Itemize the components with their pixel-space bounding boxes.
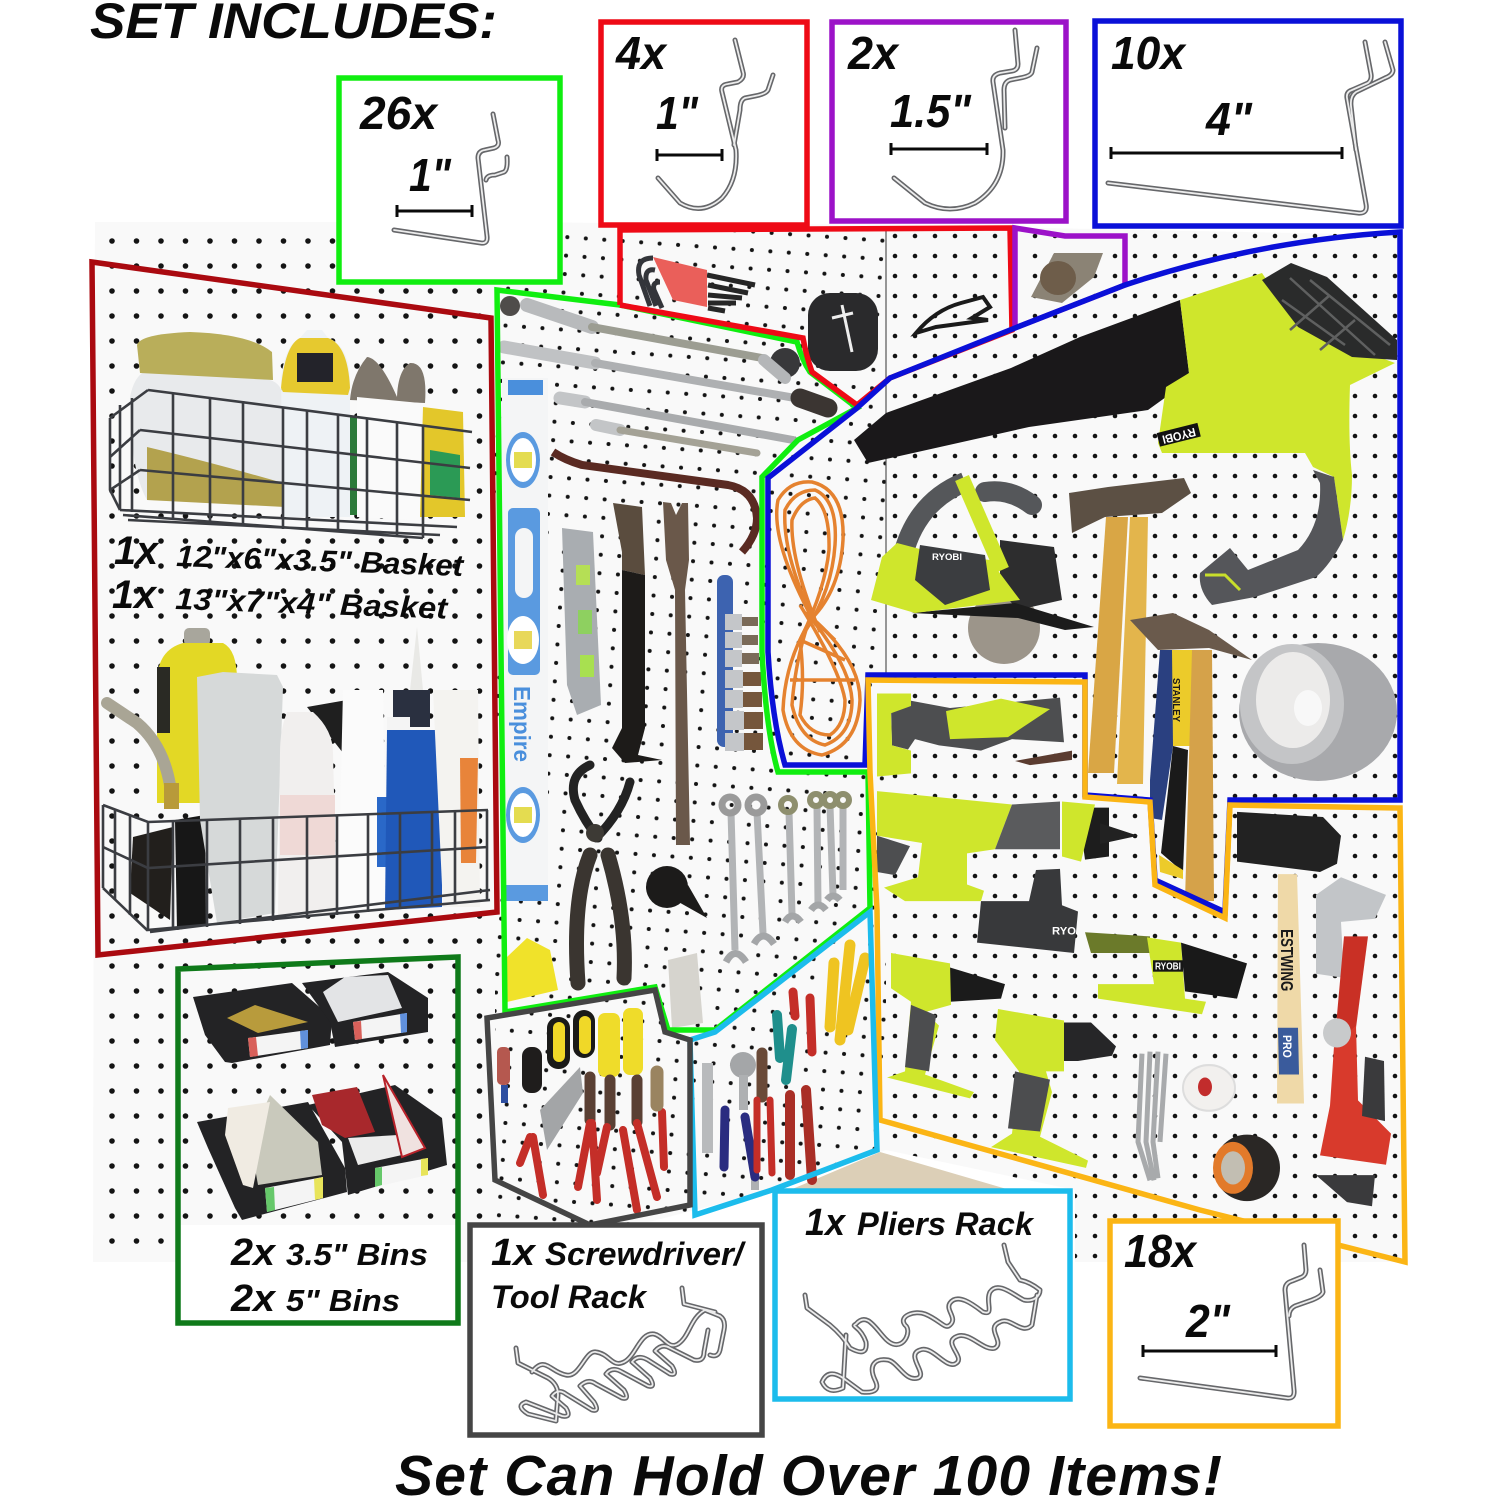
panel: screwdriver rack tools	[497, 1008, 664, 1210]
small screwdrivers	[497, 1047, 542, 1103]
leaf blower	[854, 263, 1397, 605]
red and teal pliers	[757, 992, 812, 1180]
mallet: PRO	[1280, 1035, 1294, 1058]
small parts pack	[668, 953, 703, 1028]
large pliers	[573, 765, 630, 983]
callout: bins: 2x	[230, 1278, 277, 1320]
leaf blower: RYOBI	[1161, 425, 1197, 447]
callout: 26x 1 inch hook: 1"	[409, 149, 452, 201]
callout: bins	[178, 957, 458, 1323]
outline: dark red basket region	[92, 262, 497, 955]
nail puller	[663, 502, 690, 845]
mallet: ESTWING	[1277, 929, 1298, 991]
callout: 18x 2 inch hook	[1110, 1221, 1338, 1426]
callout: 26x 1 inch hook	[339, 78, 560, 282]
black clamp	[646, 866, 707, 918]
tape measure	[507, 938, 558, 1002]
panel: pliers rack tools	[702, 945, 865, 1190]
callout: 2x 1.5 inch hook: 2x	[847, 27, 900, 79]
outline: purple tool region	[1015, 228, 1125, 328]
callout: 4x 1 inch hook: 4x	[615, 27, 668, 79]
yellow and black pliers	[830, 945, 865, 1040]
battery	[977, 869, 1078, 953]
pry bar	[612, 503, 662, 763]
panel: blue hook tools	[777, 263, 1397, 901]
outline: bright green tool region	[497, 290, 870, 1030]
small wrenches	[1138, 1052, 1166, 1180]
callout: 10x 4 inch hook: 10x	[1111, 27, 1187, 79]
crowbar	[553, 452, 757, 552]
extension cord	[777, 482, 860, 755]
basket label: 13"x7"x4" Basket	[175, 583, 450, 626]
panel: gold hook tools	[877, 693, 1391, 1206]
grey blade	[540, 1067, 583, 1150]
blue and yellow pliers	[724, 1110, 755, 1177]
socket tools	[702, 1052, 759, 1190]
torch canister	[107, 628, 237, 930]
circular saw: RYOBI	[932, 552, 962, 562]
callout: screwdriver rack	[470, 1225, 762, 1435]
outline: blue tool region	[768, 232, 1400, 912]
impact driver	[991, 1009, 1116, 1168]
callout: bins: 2x	[230, 1232, 277, 1274]
claw hammers	[1130, 613, 1252, 901]
wrench set	[722, 794, 849, 962]
flashlight	[1085, 932, 1247, 1014]
plastic case	[197, 672, 283, 923]
red handled pliers	[520, 1072, 664, 1210]
basket label: 1x	[114, 529, 160, 573]
safety glasses	[916, 297, 990, 333]
callout: pliers rack	[775, 1191, 1070, 1399]
basket label	[112, 529, 466, 626]
icon: chalk reel	[1031, 253, 1103, 303]
circular saw	[871, 478, 1094, 664]
callout: 2x 1.5 inch hook: 1.5"	[890, 85, 972, 137]
level: Empire	[509, 686, 535, 762]
work gloves	[350, 357, 425, 403]
outline: red tool region	[620, 228, 1012, 405]
callout: screwdriver rack: Screwdriver/	[545, 1236, 746, 1272]
callout: screwdriver rack: Tool Rack	[491, 1279, 648, 1315]
basket label: 1x	[112, 573, 158, 617]
panel: green hook tools	[500, 296, 849, 1028]
hammers	[1069, 478, 1191, 784]
flashlight: RYOBI	[1155, 961, 1181, 973]
outline: grey tool region	[487, 990, 690, 1225]
callout: bins: 3.5" Bins	[286, 1237, 428, 1272]
socket rail	[717, 575, 763, 751]
outline: sky blue tool region	[690, 912, 877, 1215]
callout: 18x 2 inch hook: 18x	[1124, 1225, 1198, 1277]
callout: 4x 1 inch hook: 1"	[656, 87, 699, 139]
duct tape	[1239, 643, 1397, 781]
oscillating multi-tool	[877, 693, 1072, 777]
callout: pliers rack: Pliers Rack	[857, 1206, 1035, 1242]
jar of screws	[130, 332, 285, 507]
large black bins	[197, 1075, 447, 1220]
battery: RYO	[1052, 925, 1076, 937]
package	[350, 397, 465, 520]
spray can	[281, 330, 350, 517]
pipe wrench	[1316, 877, 1391, 1206]
callout: 18x 2 inch hook: 2"	[1185, 1295, 1231, 1347]
mallet	[1237, 812, 1341, 1104]
callout: screwdriver rack: 1x	[491, 1232, 537, 1274]
callout: 26x 1 inch hook: 26x	[359, 87, 439, 139]
outline: gold tool region	[868, 680, 1405, 1262]
basket label: 12"x6"x3.5" Basket	[176, 540, 466, 583]
bluetooth speaker	[808, 293, 878, 371]
panel: red hook items	[639, 257, 990, 371]
panel: basket region	[103, 330, 490, 932]
panel: bins region	[193, 972, 447, 1220]
torpedo level	[562, 528, 601, 715]
wire basket 12x6x3.5	[110, 390, 472, 538]
callout: 4x 1 inch hook	[601, 22, 807, 225]
small black bins	[193, 972, 428, 1063]
claw hammers: STANLEY	[1170, 678, 1181, 722]
wire basket 13x7x4	[103, 805, 490, 932]
thread tape roll	[1183, 1065, 1235, 1111]
drill	[887, 953, 1005, 1098]
callout: 10x 4 inch hook	[1095, 21, 1401, 226]
reciprocating saw	[877, 791, 1138, 901]
level	[502, 378, 548, 901]
callout: bins: 5" Bins	[286, 1283, 400, 1318]
orange tape roll	[1213, 1135, 1280, 1201]
pegboard wall	[93, 222, 1405, 1262]
callout: 2x 1.5 inch hook	[832, 22, 1066, 221]
bottles and tubes	[278, 627, 480, 917]
hex key set	[639, 257, 755, 311]
socket wrenches and extensions	[500, 296, 828, 453]
yellow handled screwdrivers	[547, 1008, 643, 1077]
callout: pliers rack: 1x	[805, 1202, 847, 1244]
callout: 10x 4 inch hook: 4"	[1205, 93, 1253, 145]
